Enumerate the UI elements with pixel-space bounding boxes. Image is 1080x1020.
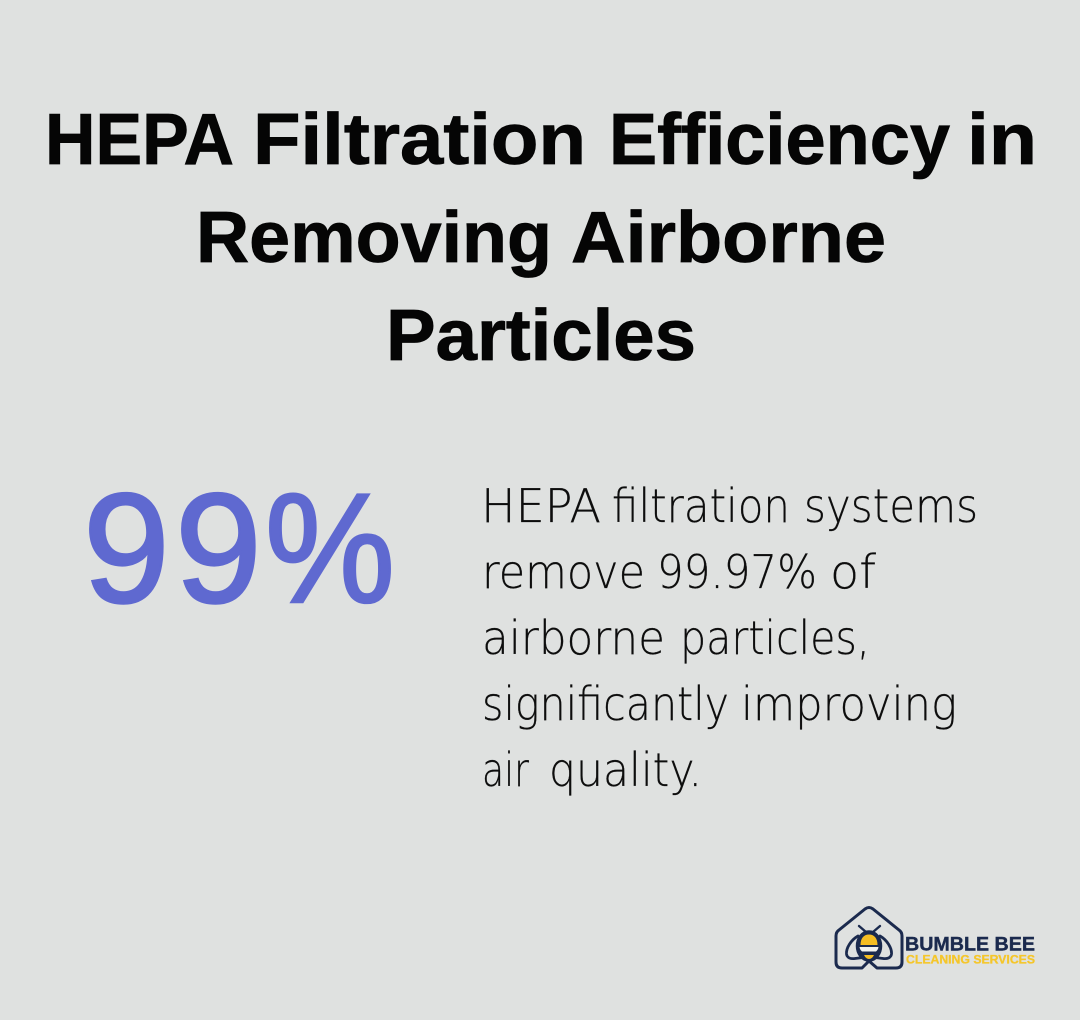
- title: in: [967, 100, 1037, 180]
- description text: systems: [804, 479, 978, 533]
- description text: air: [482, 743, 529, 797]
- big statistic: 99%: 99: [83, 462, 262, 636]
- description text: quality.: [549, 743, 702, 797]
- description text: remove: [482, 545, 645, 599]
- description text: [481, 479, 978, 797]
- description text: 99.97%: [657, 545, 817, 599]
- icon: house with bee: [836, 908, 902, 968]
- title: Efficiency: [609, 100, 950, 180]
- logo tagline: CLEANING SERVICES: [906, 952, 1035, 966]
- logo wordmark: BUMBLE BEE: [905, 934, 1035, 956]
- description text: HEPA: [481, 479, 601, 533]
- description text: of: [830, 545, 877, 599]
- title: Removing: [196, 198, 552, 278]
- title: Particles: [386, 296, 696, 376]
- title: HEPA: [45, 100, 234, 180]
- title: Airborne: [571, 198, 886, 278]
- description text: particles,: [680, 611, 870, 665]
- description text: filtration: [612, 479, 790, 533]
- description text: airborne: [482, 611, 665, 665]
- description text: significantly: [482, 677, 729, 731]
- description text: improving: [741, 677, 957, 731]
- logo: Bumble Bee Cleaning Services: [836, 908, 1035, 968]
- title: Filtration: [253, 100, 586, 180]
- title: [45, 100, 1037, 376]
- big statistic: 99%: [83, 462, 395, 636]
- big statistic: 99%: %: [265, 462, 395, 636]
